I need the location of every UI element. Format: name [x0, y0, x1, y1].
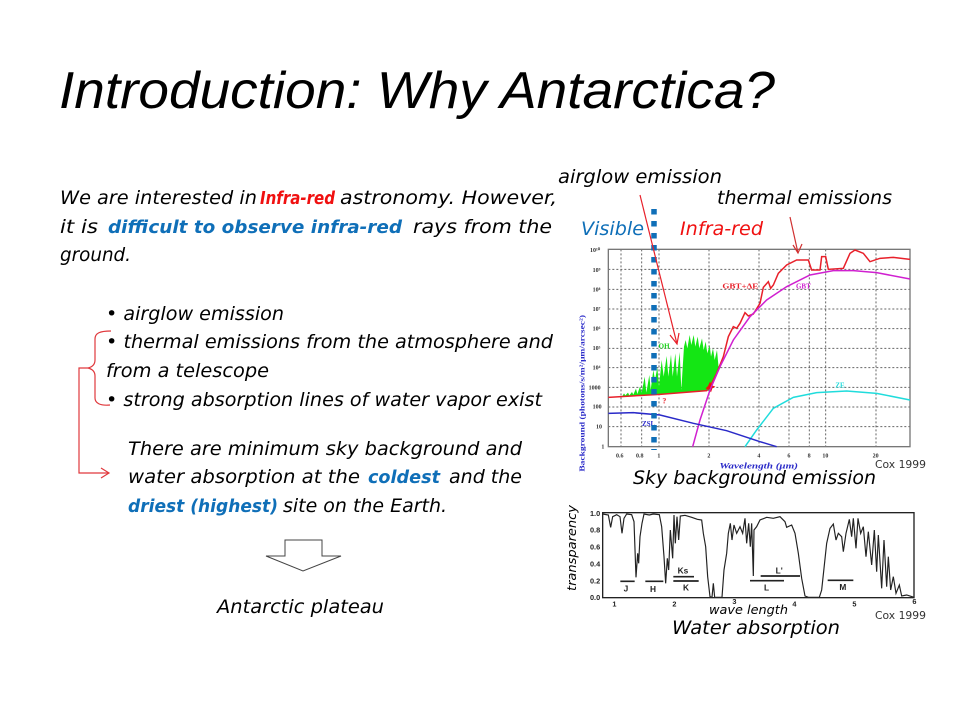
y axis tick labels: 0.4	[590, 559, 601, 568]
filter band labels: H	[650, 584, 656, 594]
text block: introduction: it is	[60, 216, 98, 238]
y axis tick labels: 0.0	[590, 593, 600, 602]
text block: introduction: difficult to observe infra-red	[108, 217, 403, 238]
y axis tick labels: 10⁷	[593, 307, 601, 313]
bullet list: causes: • thermal emissions from the atmosphere and	[106, 331, 554, 353]
caption: sky background emission: Sky background emission	[633, 467, 876, 489]
x axis tick labels: 4	[757, 453, 760, 459]
curve labels: ZE	[835, 381, 845, 389]
label: thermal emissions: thermal emissions	[717, 187, 892, 209]
x axis tick labels: 4	[792, 599, 797, 608]
filter band labels: M	[839, 582, 846, 592]
x axis tick labels: 0.8	[636, 453, 643, 459]
text block: introduction	[60, 187, 557, 266]
x axis tick labels: 6	[787, 453, 790, 459]
text block: conclusion: There are minimum sky background and	[128, 438, 523, 460]
text block: conclusion: water absorption at the	[128, 466, 360, 488]
magenta GBT curve	[693, 271, 910, 447]
y axis tick labels: 100	[593, 405, 602, 411]
curve labels: ZSL	[642, 420, 656, 428]
curve labels: ?	[662, 396, 666, 405]
y axis tick labels: 10⁶	[593, 327, 601, 333]
text block: introduction: astronomy. However,	[340, 187, 557, 209]
y axis tick labels: 1.0	[590, 509, 600, 518]
bullet list: causes: • strong absorption lines of water vapor exist	[106, 389, 544, 411]
filter band labels: J	[624, 584, 629, 594]
red total background curve	[608, 250, 910, 397]
x axis title: Wavelength (μm)	[719, 462, 798, 471]
y axis tick labels: 10	[596, 425, 602, 431]
text block: introduction: ground.	[60, 244, 131, 266]
axis label: wave length: wave length	[709, 602, 788, 617]
bullet list: causes	[106, 303, 554, 411]
x axis tick labels: 8	[808, 453, 811, 459]
x axis tick labels: 3	[732, 597, 736, 606]
x axis tick labels: 2	[672, 599, 676, 608]
caption: water absorption: Water absorption	[672, 617, 840, 639]
text block: conclusion: and the	[449, 466, 522, 488]
y axis tick labels	[590, 509, 601, 602]
text block: introduction: Infra-red	[260, 188, 336, 209]
text block: introduction: rays from the	[413, 216, 552, 238]
y axis tick labels: 0.6	[590, 543, 600, 552]
filter band labels: K	[683, 583, 689, 593]
text block: conclusion	[128, 438, 523, 517]
x axis tick labels: 10	[822, 453, 828, 459]
text block: conclusion: driest (highest)	[128, 496, 278, 517]
filter band labels: Ks	[678, 565, 689, 575]
x axis tick labels: 20	[873, 453, 879, 459]
text block: conclusion: site on the Earth.	[283, 495, 447, 517]
curve labels: OH	[659, 343, 670, 351]
y axis tick labels: 0.8	[590, 526, 600, 535]
x axis tick labels: 1	[657, 453, 660, 459]
plot frame and grid	[608, 249, 910, 447]
y axis tick labels: 10⁸	[593, 287, 601, 293]
plot frame	[603, 513, 914, 598]
text block: introduction: We are interested in	[60, 187, 257, 209]
y axis tick labels: 10¹⁰	[590, 247, 601, 254]
x axis tick labels: 6	[912, 597, 916, 606]
y axis tick labels: 1	[601, 444, 604, 450]
transparency trace	[603, 514, 914, 597]
axis label: transparency: transparency	[564, 504, 579, 591]
filter band labels	[624, 565, 846, 594]
y axis title: Background (photons/s/m²/μm/arcsec²)	[578, 314, 587, 472]
curve labels: GBT+ΔE	[722, 283, 759, 291]
bullet list: causes: from a telescope	[106, 360, 269, 382]
source: Cox 1999: Cox 1999	[875, 459, 926, 471]
y axis tick labels: 0.2	[590, 576, 600, 585]
bracket arrow	[79, 331, 111, 478]
chart: sky background emission	[578, 247, 910, 472]
x axis tick labels: 5	[852, 599, 856, 608]
cyan ZE curve	[745, 391, 910, 447]
y axis tick labels: 1000	[589, 385, 601, 391]
title: Introduction: Why Antarctica?	[59, 62, 775, 120]
bullet list: causes: • airglow emission	[106, 303, 284, 325]
filter band labels: L'	[776, 565, 783, 575]
text: Antarctic plateau: Antarctic plateau	[215, 596, 384, 618]
x axis tick labels	[612, 597, 916, 608]
y axis tick labels: 10⁹	[593, 268, 601, 274]
x axis tick labels: 2	[707, 453, 710, 459]
curve labels	[642, 283, 845, 428]
curve labels: GBT	[796, 283, 811, 291]
y axis tick labels: 10⁴	[593, 366, 601, 372]
y axis tick labels	[589, 247, 604, 450]
label: Infra-red: Infra-red	[680, 218, 764, 240]
blue ZSL curve	[608, 413, 777, 447]
arrow: thermal	[790, 217, 802, 253]
label: airglow emission: airglow emission	[558, 166, 722, 188]
x axis tick labels: 0.6	[616, 453, 623, 459]
x axis tick labels	[616, 453, 879, 459]
label: Visible: Visible	[581, 218, 644, 240]
source: Cox 1999: Cox 1999	[875, 610, 926, 622]
visible / infra-red divider	[651, 209, 657, 450]
arrow: airglow	[640, 195, 679, 344]
chart: water absorption	[590, 509, 916, 608]
x axis tick labels: 1	[612, 599, 616, 608]
green OH emission	[622, 335, 719, 397]
filter band labels: L	[764, 582, 769, 592]
filter band bars	[620, 576, 853, 581]
red star marker	[705, 382, 715, 392]
text block: conclusion: coldest	[368, 467, 441, 488]
y axis tick labels: 10⁵	[593, 346, 601, 352]
icon: block down arrow	[266, 540, 341, 571]
